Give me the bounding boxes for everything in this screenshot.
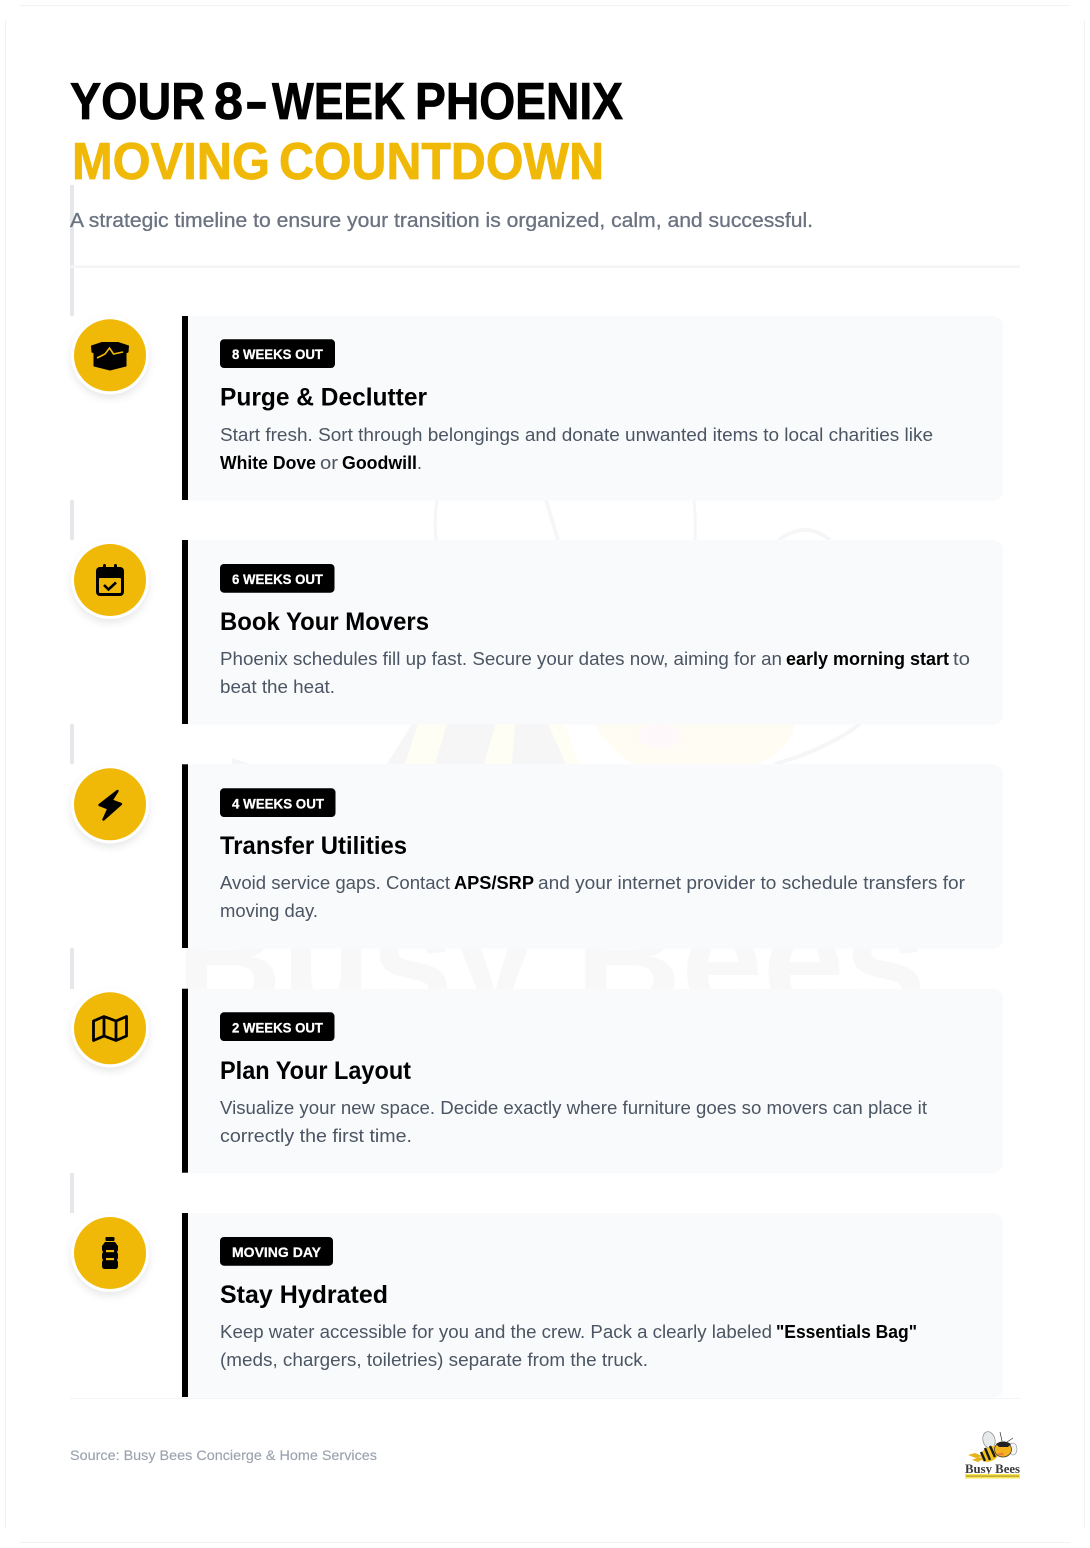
watermark: Busy Bees bee logo: Busy Bees <box>176 878 926 1042</box>
timeline line segments <box>70 185 74 1213</box>
card text: (meds, chargers, toiletries) separate from the truck. <box>220 1350 648 1370</box>
card text: to <box>953 649 970 669</box>
step 2: 6 weeks out <box>71 540 1003 724</box>
title: - <box>245 73 268 131</box>
card text: "Essentials Bag" <box>776 1322 917 1342</box>
title: WEEK <box>272 73 405 131</box>
logo: Busy Bees bee: Busy Bees <box>965 1461 1020 1476</box>
card heading: Transfer Utilities <box>220 832 407 860</box>
badge: 6 WEEKS OUT <box>232 571 323 587</box>
card text: or <box>320 453 338 473</box>
badge <box>220 1237 333 1266</box>
card text: Goodwill <box>342 453 417 473</box>
card text: and your internet provider to schedule transfers for <box>538 873 965 893</box>
card text <box>220 649 970 697</box>
badge <box>220 564 334 593</box>
card text <box>220 1322 917 1370</box>
card text: moving day. <box>220 901 318 921</box>
card panel <box>182 989 1003 1173</box>
title: 8 <box>214 73 243 131</box>
step 4: 2 weeks out <box>71 989 1003 1173</box>
card text <box>220 873 965 921</box>
card text: Visualize your new space. Decide exactly where furniture goes so movers can place it <box>220 1098 927 1118</box>
badge <box>220 788 336 817</box>
card panel <box>182 764 1003 948</box>
card text: White Dove <box>220 453 316 473</box>
step 1: 8 weeks out <box>71 316 1003 500</box>
icon: water bottle <box>71 1214 149 1292</box>
logo: Busy Bees bee <box>965 1430 1020 1478</box>
title: YOUR <box>70 73 205 131</box>
icon: calendar check <box>71 541 149 619</box>
card text: early morning start <box>786 649 949 669</box>
card text <box>220 425 933 473</box>
subtitle: A strategic timeline to ensure your transition is organized, calm, and successful. <box>70 210 813 232</box>
source line: Source: Busy Bees Concierge & Home Services <box>70 1447 377 1463</box>
card text: correctly the first time. <box>220 1126 412 1146</box>
card panel <box>182 540 1003 724</box>
card heading: Stay Hydrated <box>220 1281 388 1309</box>
card heading: Purge & Declutter <box>220 384 427 412</box>
badge: 4 WEEKS OUT <box>232 795 324 811</box>
title: COUNTDOWN <box>279 133 604 191</box>
card text: APS/SRP <box>454 873 534 893</box>
title <box>70 73 623 191</box>
step 3: 4 weeks out <box>71 764 1003 948</box>
card text: Avoid service gaps. Contact <box>220 873 450 893</box>
card text: Keep water accessible for you and the crew. Pack a clearly labeled <box>220 1322 772 1342</box>
card heading: Book Your Movers <box>220 608 429 636</box>
card text <box>220 1098 927 1146</box>
card heading: Plan Your Layout <box>220 1057 412 1085</box>
badge <box>220 339 335 368</box>
title: MOVING <box>72 133 270 191</box>
icon: open box <box>71 316 149 394</box>
card text: . <box>417 453 422 473</box>
step 5: moving day <box>71 1213 1003 1398</box>
card panel <box>182 316 1003 500</box>
watermark: Busy Bees bee logo <box>176 500 926 1042</box>
badge <box>220 1012 334 1041</box>
card panel <box>182 1213 1003 1398</box>
card text: beat the heat. <box>220 677 335 697</box>
icon: folded map <box>71 989 149 1067</box>
badge: 8 WEEKS OUT <box>232 346 323 362</box>
card text: Phoenix schedules fill up fast. Secure your dates now, aiming for an <box>220 649 782 669</box>
title: PHOENIX <box>415 73 623 131</box>
badge: 2 WEEKS OUT <box>232 1019 323 1035</box>
card text: Start fresh. Sort through belongings and donate unwanted items to local charities like <box>220 425 933 445</box>
icon: lightning bolt <box>71 765 149 843</box>
badge: MOVING DAY <box>232 1244 322 1260</box>
